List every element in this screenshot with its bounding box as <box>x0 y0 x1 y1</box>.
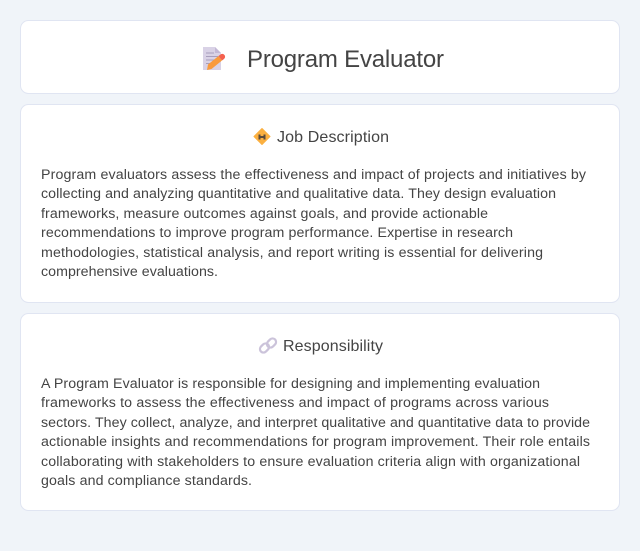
panel: title card <box>20 20 620 94</box>
panel: responsibility <box>20 314 620 510</box>
text block: responsibility: A Program Evaluator is responsible for designing and implementing evaluation <box>41 376 540 392</box>
text block: responsibility: frameworks to assess the effectiveness and impact of programs across various <box>41 395 549 411</box>
text block: job description: methodologies, statistical analysis, and report writing is essential for delivering <box>41 245 543 261</box>
text block: job description: recommendations to improve program performance. Expertise in research <box>41 225 513 241</box>
heading: responsibility: Responsibility <box>283 338 383 355</box>
icon: chain link <box>258 337 278 354</box>
text block: responsibility: sectors. They collect, analyze, and interpret qualitative and quantitative data to provide <box>41 415 590 431</box>
text block: job description: Program evaluators assess the effectiveness and impact of projects and initiatives by <box>41 167 587 183</box>
heading: job description: Job Description <box>277 129 389 146</box>
text block: responsibility <box>41 376 590 489</box>
icon: diamond sign <box>254 128 270 144</box>
title: Program Evaluator <box>247 46 444 73</box>
text block: job description: collecting and analyzing quantitative and qualitative data. They design evaluation <box>41 186 556 202</box>
text block: job description: comprehensive evaluations. <box>41 264 218 280</box>
text block: responsibility: actionable insights and recommendations for program improvement. Their role entails <box>41 434 590 450</box>
text block: responsibility: goals and compliance standards. <box>41 473 252 489</box>
icon: document with pencil <box>203 47 225 70</box>
text block: responsibility: collaborating with stakeholders to ensure evaluation criteria align with organizational <box>41 454 580 470</box>
panel: job description <box>20 104 620 302</box>
text block: job description: frameworks, measure outcomes against goals, and provide actionable <box>41 206 488 222</box>
text block: job description <box>41 167 587 280</box>
